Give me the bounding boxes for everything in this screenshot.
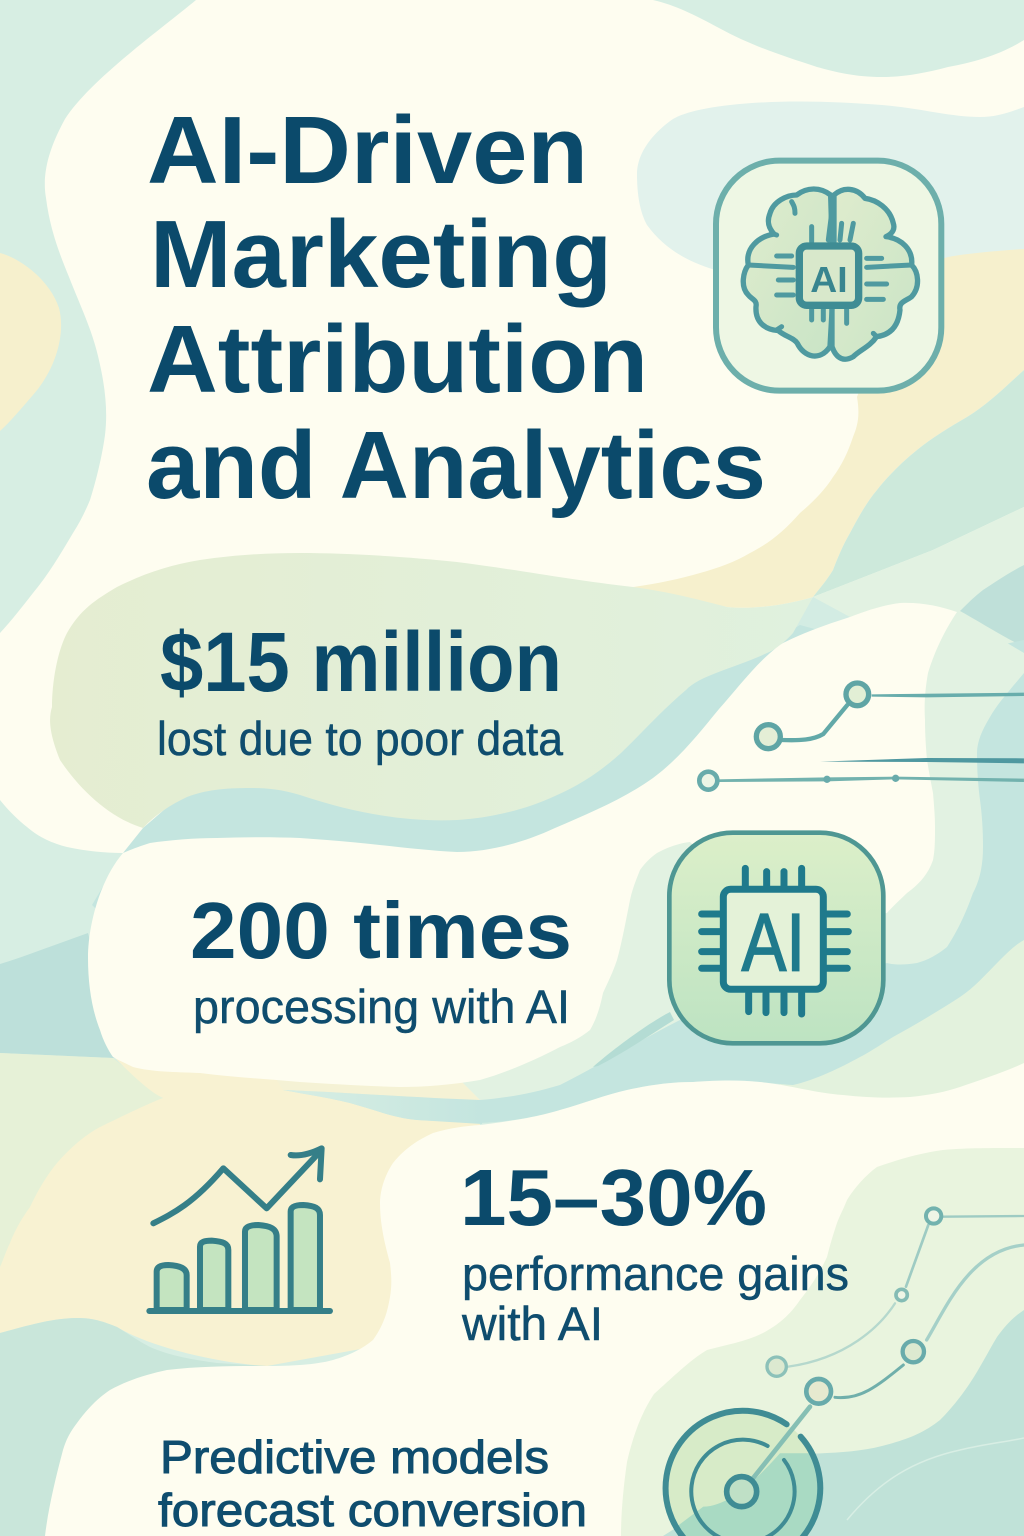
stat: 15–30%: 15–30%: [460, 1153, 767, 1242]
icon: target with arrow: [663, 1407, 827, 1536]
title: Attribution: [147, 306, 648, 413]
title: Marketing: [150, 201, 612, 308]
icon: brain with AI chip: AI: [810, 259, 848, 300]
stat: 200 times: processing with AI: [193, 980, 570, 1033]
title: AI-Driven: [147, 97, 588, 204]
icon: rising bar chart: [149, 1148, 330, 1311]
stat: $15 million: lost due to poor data: [157, 712, 564, 765]
title: and Analytics: [146, 412, 766, 519]
stat: $15 million: [157, 615, 564, 765]
stat: $15 million: $15 million: [160, 615, 562, 709]
circuit lines, lower: [767, 1208, 1024, 1404]
stat: 15–30%: [460, 1153, 849, 1350]
text: predictive models: [158, 1431, 587, 1536]
icon: AI chip: [669, 833, 883, 1043]
text: predictive models: forecast conversion: [158, 1484, 587, 1536]
circuit lines, upper: [699, 683, 1024, 790]
icon: AI chip: AI: [742, 898, 805, 989]
text: predictive models: Predictive models: [160, 1431, 549, 1483]
title: [146, 97, 766, 519]
stat: 200 times: 200 times: [190, 886, 572, 975]
stat: 15–30%: with AI: [461, 1297, 603, 1350]
stat: 15–30%: performance gains: [462, 1247, 849, 1300]
stat: 200 times: [190, 886, 572, 1033]
icon: brain with AI chip: [716, 161, 941, 391]
